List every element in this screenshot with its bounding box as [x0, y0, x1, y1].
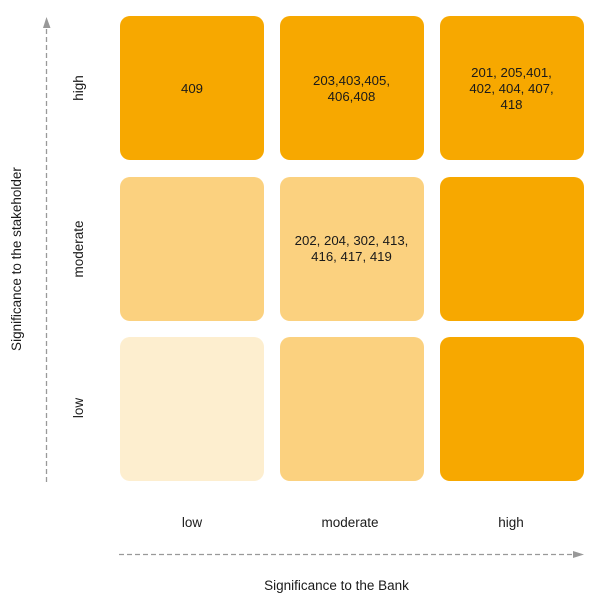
x-axis level label: low: low	[182, 515, 202, 530]
y-axis level label: high: high	[71, 75, 86, 101]
x-axis level label: moderate: moderate	[321, 515, 379, 530]
cell: moderate stakeholder, moderate bank: 202, 204, 302, 413,	[295, 233, 408, 248]
cell: moderate stakeholder, moderate bank	[280, 177, 424, 321]
cell: high stakeholder, low bank: 409	[181, 81, 203, 96]
arrow: y axis	[43, 17, 50, 482]
cell: moderate stakeholder, low bank	[120, 177, 264, 321]
x-axis level label: high: high	[498, 515, 524, 530]
cell: high stakeholder, high bank: 402, 404, 407,	[469, 81, 554, 96]
cell: high stakeholder, moderate bank: 203,403,405,	[313, 73, 390, 88]
x-axis title: Significance to the Bank	[264, 578, 409, 593]
cell: low stakeholder, high bank	[440, 337, 584, 481]
y-axis level label: low: low	[71, 398, 86, 418]
cell: high stakeholder, high bank	[440, 16, 584, 160]
cell: moderate stakeholder, moderate bank: 416, 417, 419	[311, 249, 392, 264]
cell: high stakeholder, moderate bank: 406,408	[328, 89, 375, 104]
cell: moderate stakeholder, high bank	[440, 177, 584, 321]
cell: high stakeholder, moderate bank	[280, 16, 424, 160]
cell: low stakeholder, low bank	[120, 337, 264, 481]
cell: low stakeholder, moderate bank	[280, 337, 424, 481]
y-axis title: Significance to the stakeholder	[9, 167, 24, 351]
cell: high stakeholder, high bank: 418	[500, 97, 523, 112]
arrow: x axis	[119, 551, 584, 558]
y-axis level label: moderate: moderate	[71, 220, 86, 278]
cell: high stakeholder, high bank: 201, 205,401,	[471, 65, 552, 80]
cell: high stakeholder, low bank	[120, 16, 264, 160]
